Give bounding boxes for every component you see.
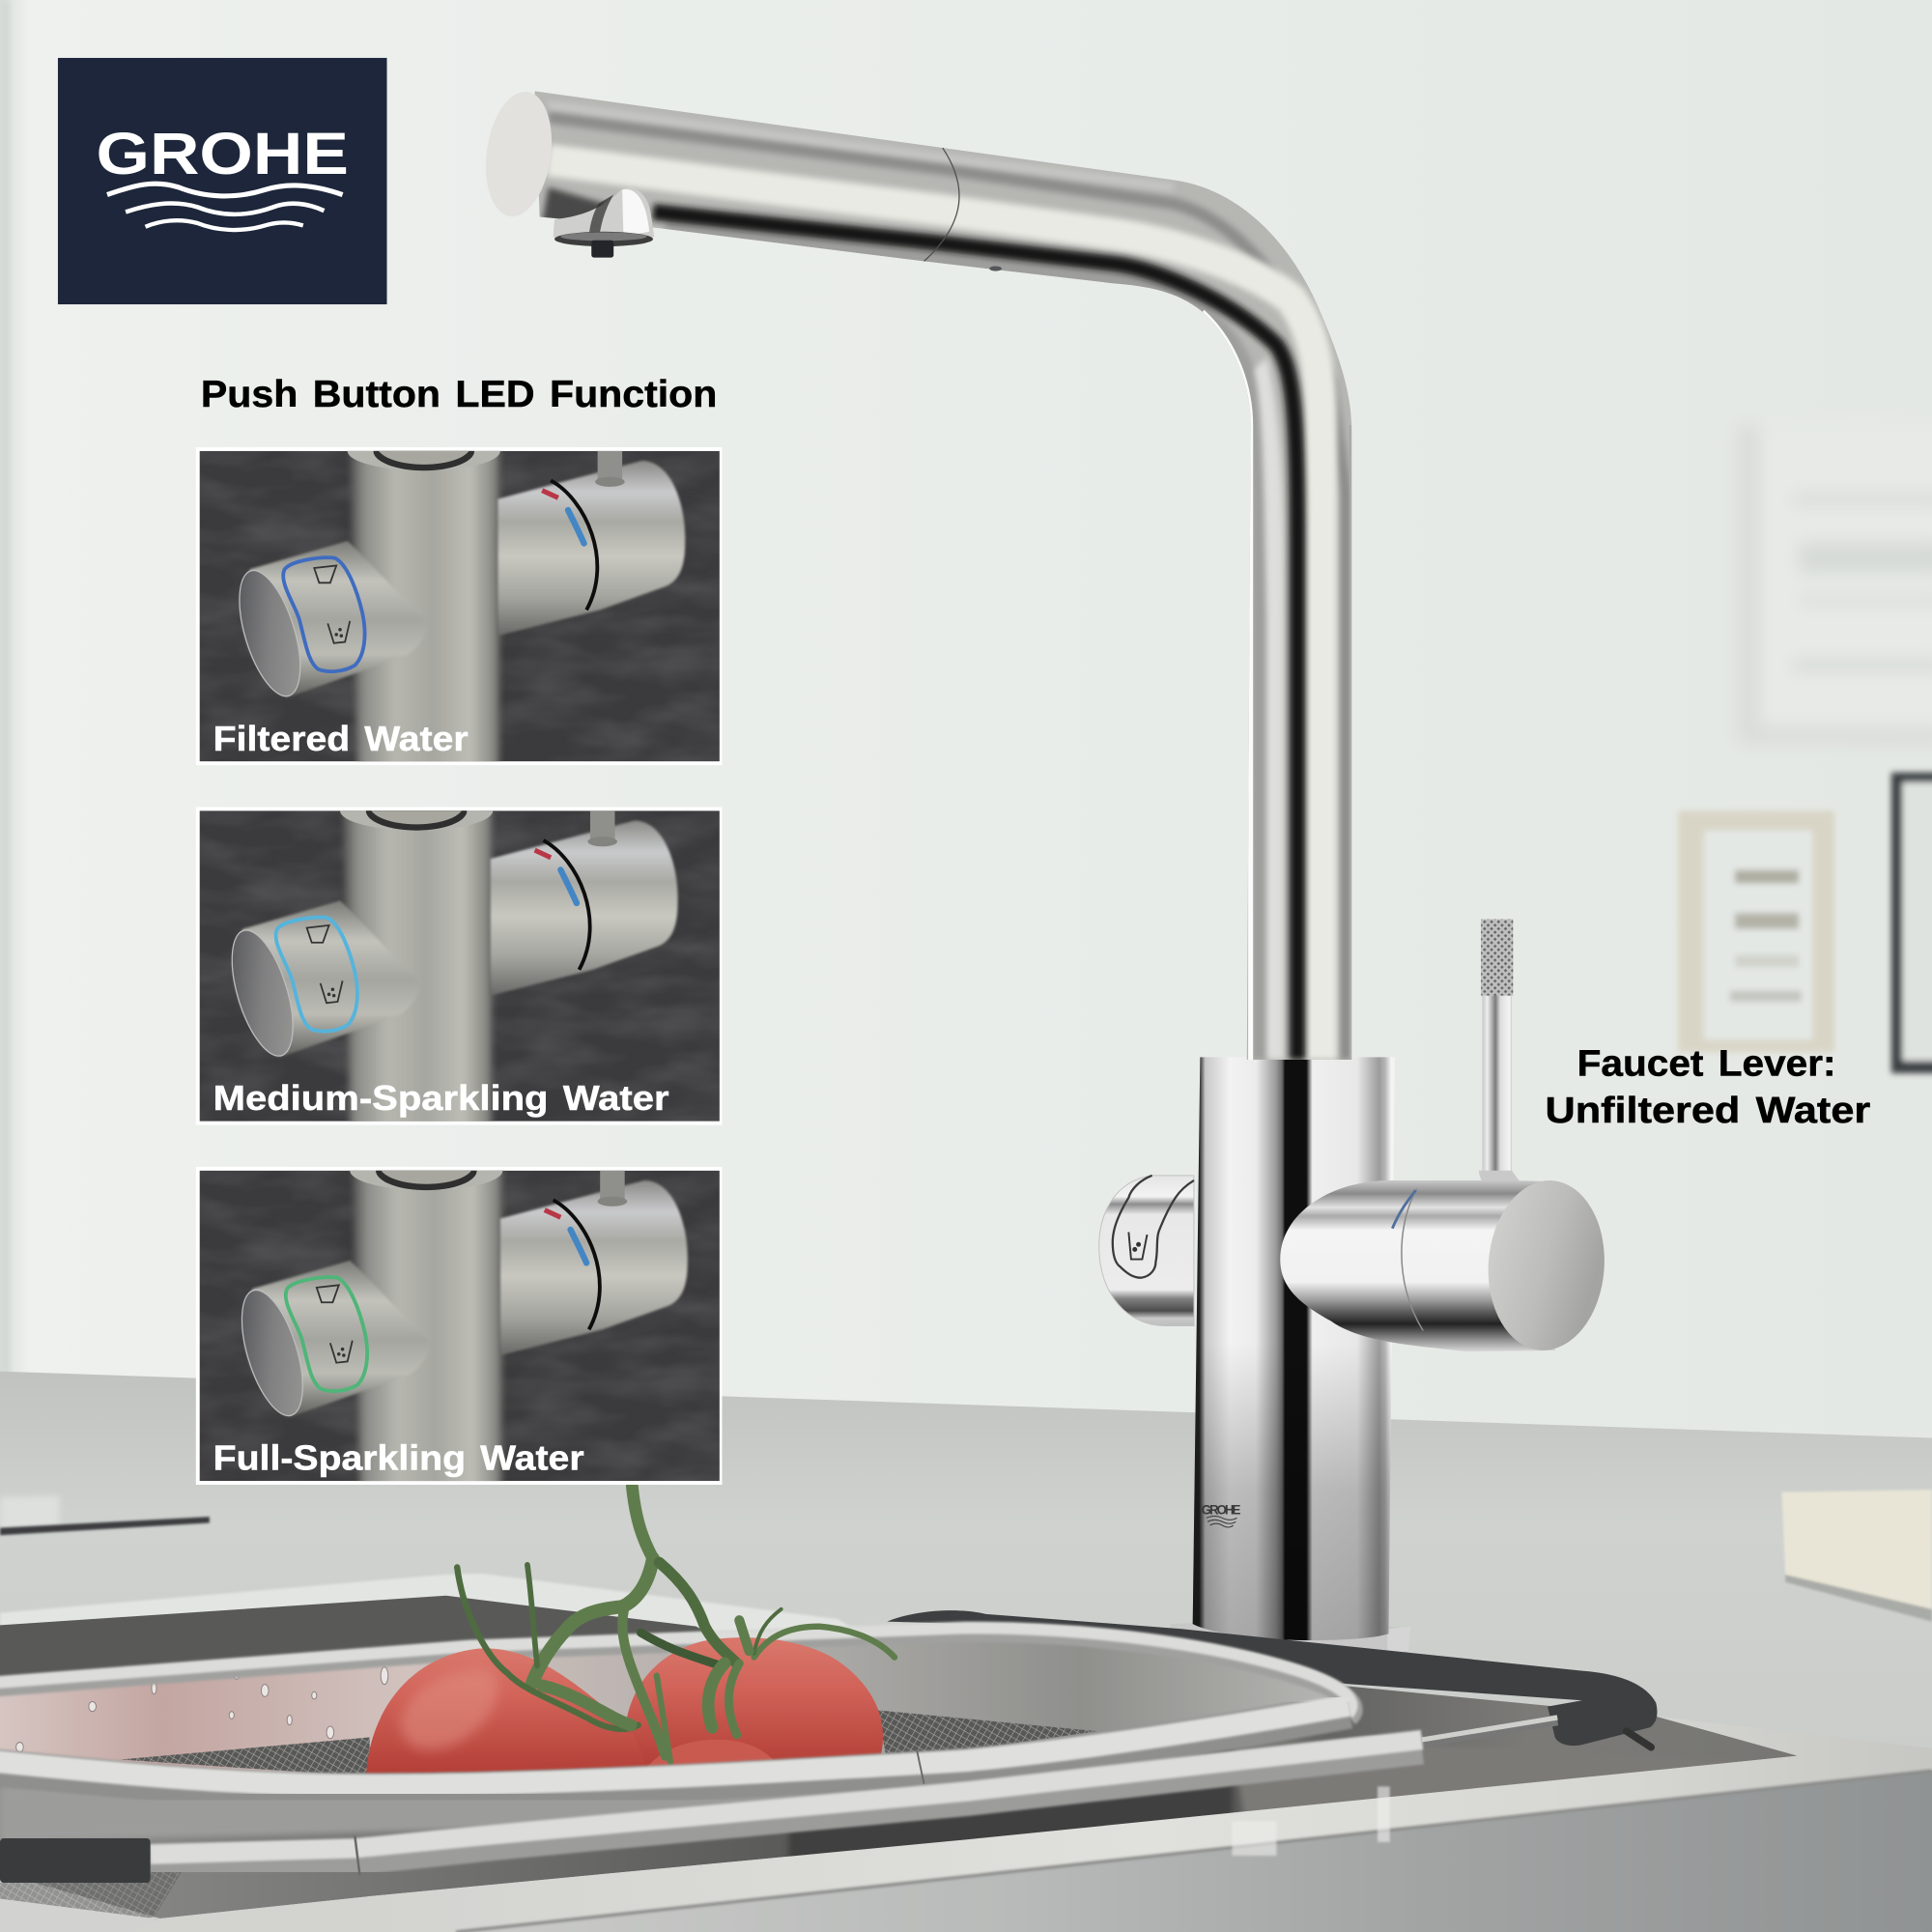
- colander front rim: [0, 1705, 1350, 1792]
- spout aerator nozzle: [554, 187, 654, 258]
- colander back rim: [0, 1628, 1353, 1718]
- faucet base flange: [1171, 1622, 1410, 1658]
- water droplets: [16, 1667, 388, 1752]
- faucet spout: [535, 91, 1351, 1060]
- tomato vine: [457, 1486, 895, 1762]
- panel: Medium-Sparkling Water: Medium-Sparkling Water: [213, 1079, 669, 1118]
- left tomato: [366, 1648, 648, 1780]
- engraved GROHE mark on faucet body: [1202, 1503, 1241, 1527]
- wooden board: [1781, 1490, 1932, 1622]
- panel: Full-Sparkling Water: Full-Sparkling Water: [213, 1439, 584, 1478]
- left push button on main faucet: [1099, 1176, 1194, 1325]
- LED ring green: [286, 1277, 367, 1391]
- callout: Faucet Lever: Unfiltered Water: [1545, 1043, 1870, 1131]
- engraved GROHE mark on faucet body: GROHE: [1202, 1503, 1241, 1518]
- tomatoes: [366, 1637, 883, 1780]
- sink interior: [0, 1624, 1798, 1932]
- heading: Push Button LED Function: Push Button LED Function: [201, 374, 717, 415]
- panel: Filtered Water: Filtered Water: [213, 720, 469, 758]
- LED ring blue: [283, 557, 365, 671]
- colander black handle: [887, 1610, 1657, 1747]
- colander bowl: [0, 1633, 1351, 1789]
- GROHE logo: GROHE: [96, 121, 349, 186]
- sink steel front: [456, 1771, 1932, 1932]
- right control handle: [1280, 1177, 1610, 1354]
- LED outline on main button: [1113, 1176, 1194, 1278]
- small tomato: [639, 1740, 784, 1780]
- panel: Full-Sparkling Water: [196, 1148, 722, 1508]
- callout: Faucet Lever: Unfiltered Water: Faucet Lever:: [1577, 1043, 1836, 1085]
- spout end cap: [478, 87, 559, 220]
- GROHE logo: [58, 58, 387, 304]
- back sink rim and well: [0, 1574, 887, 1737]
- faucet lever: [1479, 920, 1534, 1202]
- callout: Faucet Lever: Unfiltered Water: Unfiltered Water: [1545, 1090, 1870, 1131]
- countertop: [0, 1372, 1932, 1932]
- left tomato highlight: [401, 1669, 497, 1749]
- cup icon on main button: [1128, 1233, 1148, 1260]
- colander mesh bottom: [121, 1710, 1096, 1776]
- blurred wall frame, upper right: [1737, 425, 1932, 744]
- faucet body: [1193, 1057, 1395, 1640]
- LED ring light blue: [276, 918, 357, 1032]
- sink rim: [135, 1717, 1932, 1932]
- right tomato: [624, 1637, 883, 1775]
- blurred wall frame, wood: [1678, 810, 1834, 1052]
- blurred wall frame, dark: [1891, 773, 1932, 1073]
- colander lower arm: [151, 1718, 1557, 1875]
- panel: Medium-Sparkling Water: [196, 787, 722, 1149]
- colander left handle grip: [0, 1838, 151, 1883]
- panel: Filtered Water: [196, 428, 722, 788]
